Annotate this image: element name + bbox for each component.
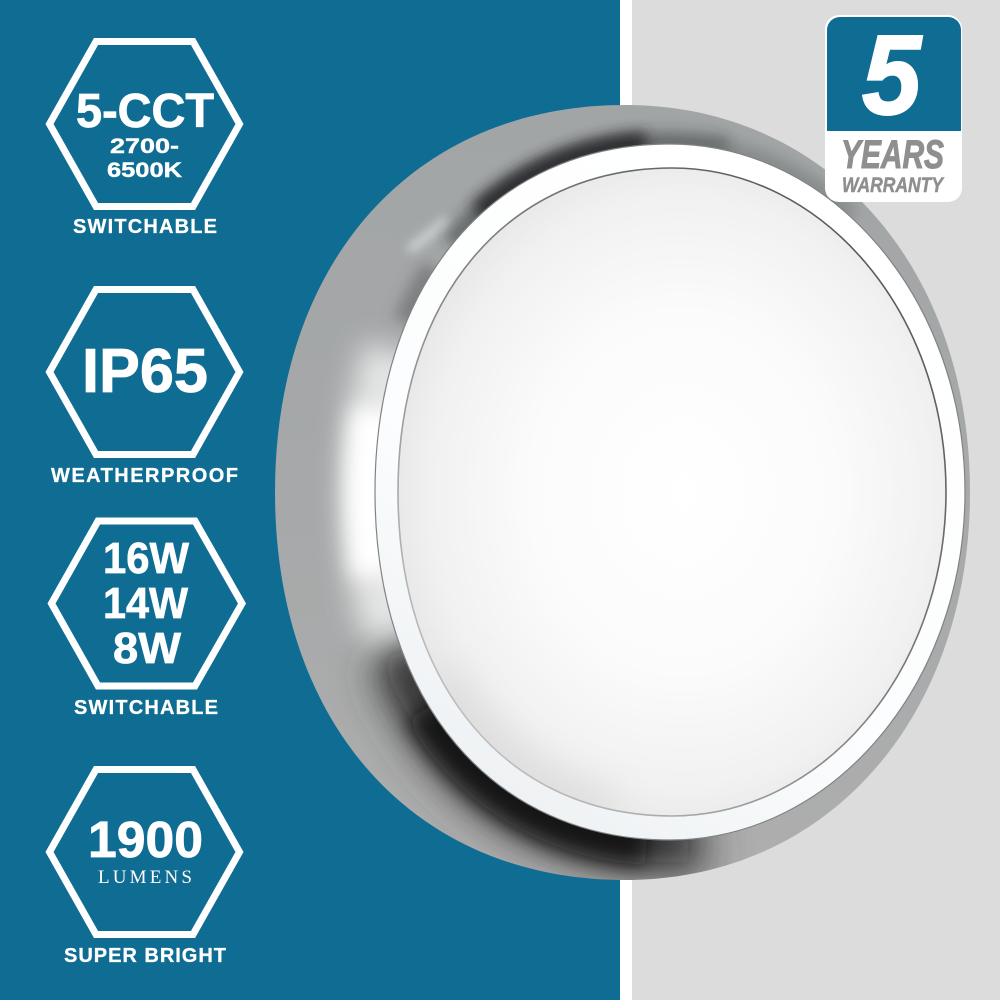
feature: 1900 lumens <box>50 770 240 967</box>
badge white card <box>825 15 962 202</box>
hexagon outline <box>52 521 242 686</box>
lamp body with metallic shading <box>270 100 975 885</box>
opal lens <box>398 168 946 816</box>
lens lower shade <box>454 693 598 804</box>
product: round bulkhead light <box>270 100 975 885</box>
wattage 8W: 8W <box>113 624 181 673</box>
colour temperature line one: 2700- <box>110 135 179 158</box>
caption: SWITCHABLE <box>73 216 217 238</box>
feature: IP65 weatherproof <box>50 290 240 487</box>
colour temperature line two: 6500K <box>107 159 182 182</box>
wattage 14W: 14W <box>103 579 188 628</box>
panel: blue feature column <box>0 0 620 1000</box>
warranty years label: YEARS <box>841 133 944 177</box>
caption: WEATHERPROOF <box>51 465 238 487</box>
feature: switchable wattage <box>52 521 242 719</box>
hexagon outline <box>50 770 240 934</box>
heading IP65: IP65 <box>82 337 208 406</box>
bezel ring <box>375 144 965 840</box>
badge: 5 years warranty <box>825 12 962 202</box>
hexagon outline <box>50 290 240 454</box>
lumens unit: LUMENS <box>98 867 192 888</box>
caption: SWITCHABLE <box>74 697 218 719</box>
wattage 16W: 16W <box>103 534 189 583</box>
warranty number: 5 <box>862 12 923 138</box>
divider: white vertical band <box>620 0 632 1000</box>
hexagon outline <box>50 42 240 206</box>
heading 1900: 1900 <box>88 811 203 868</box>
warranty label: WARRANTY <box>842 174 945 197</box>
lens rim line <box>398 168 946 816</box>
badge blue header <box>827 17 961 131</box>
heading 5-CCT: 5-CCT <box>76 85 214 138</box>
feature: 5-CCT switchable <box>50 42 240 238</box>
caption: SUPER BRIGHT <box>64 945 226 967</box>
